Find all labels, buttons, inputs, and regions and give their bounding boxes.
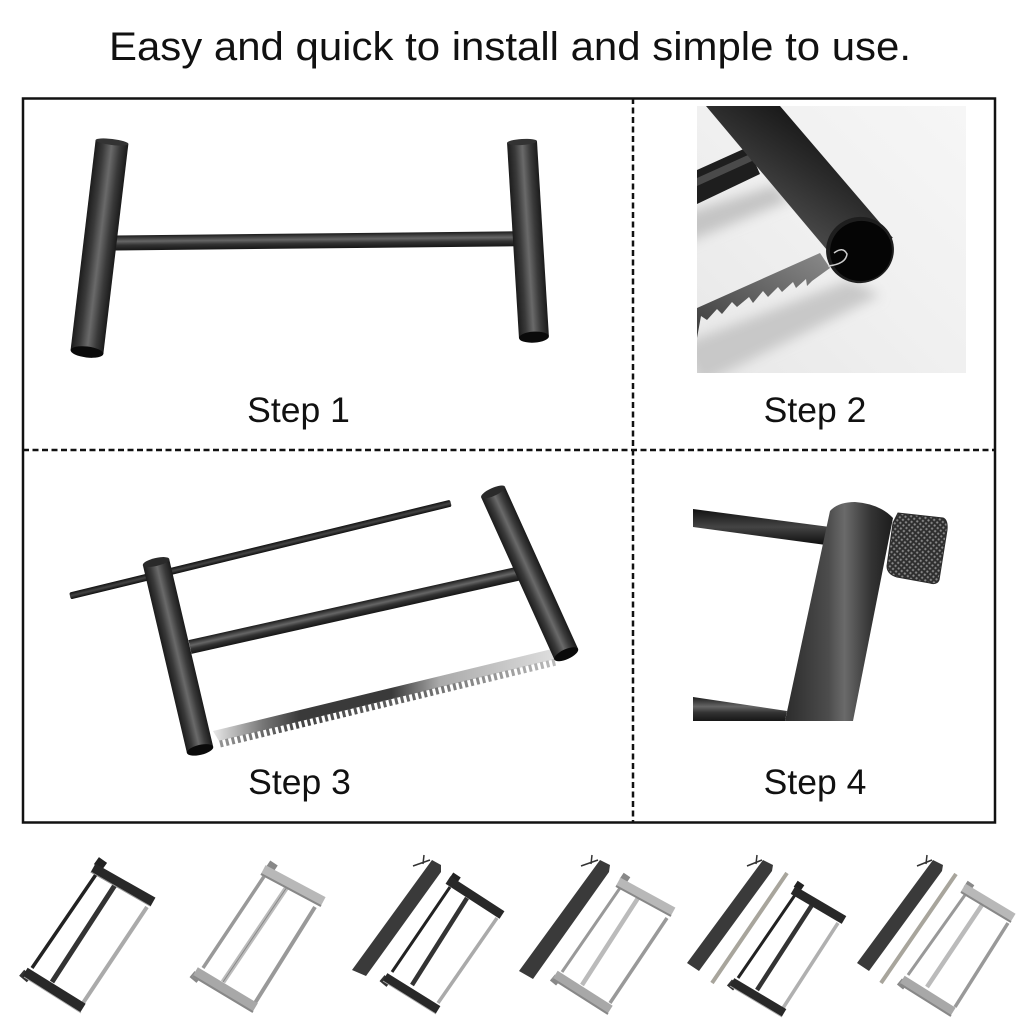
thumbnail 6: silver saw with sheath and blade: [857, 855, 1013, 1016]
thumbnail 4: silver saw with sheath: [519, 855, 673, 1014]
thumbnail 1: black saw: [23, 860, 153, 1013]
title: Easy and quick to install and simple to use.: [109, 25, 911, 69]
label: step 1: Step 1: [247, 390, 350, 430]
step 3 assembly image: [69, 483, 580, 758]
label: step 4: Step 4: [764, 762, 866, 802]
step 2 photo: [680, 106, 966, 385]
thumbnail 2: silver saw: [193, 863, 323, 1012]
step 4 knob close-up: [693, 502, 947, 721]
panel frame with four steps: [23, 98, 995, 822]
thumbnail 3: black saw with sheath: [352, 855, 502, 1014]
step 1 frame image: [70, 137, 549, 359]
label: step 2: Step 2: [764, 390, 866, 430]
label: step 3: Step 3: [248, 762, 351, 802]
thumbnail 5: black saw with sheath and blade: [687, 855, 844, 1017]
